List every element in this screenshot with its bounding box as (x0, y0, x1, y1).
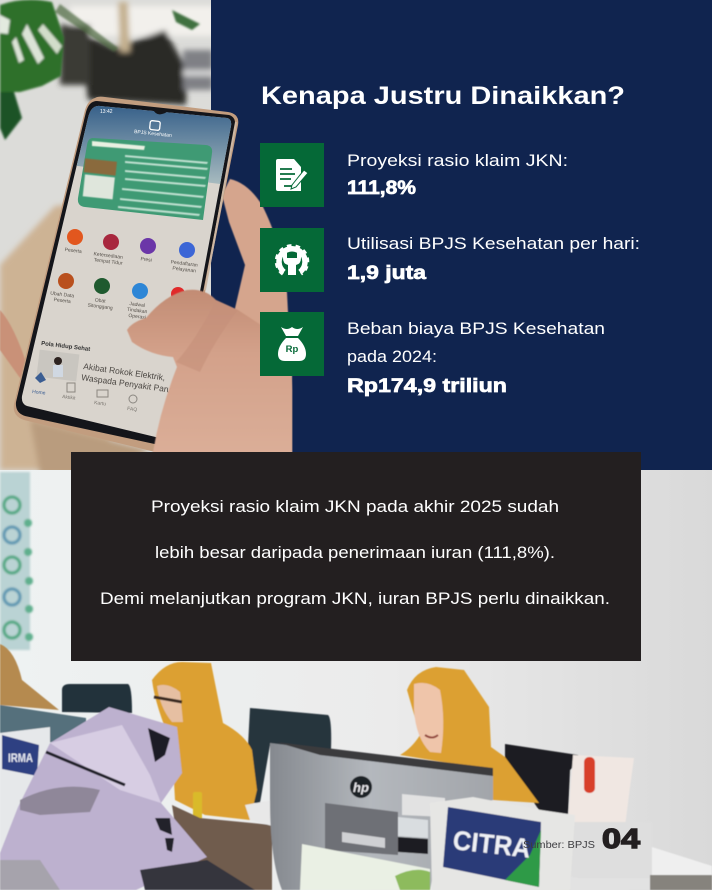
menu labels: Presi (140, 256, 152, 264)
value: Rp174,9 triliun (347, 375, 507, 397)
CITRA sign: CITRA (451, 825, 532, 864)
left monitor (0, 705, 86, 745)
decorative wall pattern (0, 472, 33, 650)
label second line: pada 2024: (347, 347, 437, 366)
wall (0, 470, 712, 890)
app banner (78, 138, 212, 220)
healthy living article: Waspada Penyakit Paru (81, 372, 172, 395)
plant leaves (0, 0, 200, 140)
page number: 04 (602, 823, 641, 854)
photo details (0, 644, 712, 890)
HP monitor: hp (353, 780, 369, 795)
photo: BPJS service counter (0, 470, 712, 890)
hand: thumb and palm (127, 290, 292, 470)
photo background: room (0, 0, 215, 475)
source credit: Sumber: BPJS (523, 839, 595, 851)
banner illustration (83, 141, 208, 216)
label: Beban biaya BPJS Kesehatan (347, 319, 605, 338)
purple patterned hijab (0, 707, 255, 890)
bottom nav: Home (32, 389, 46, 397)
CITRA sign (430, 797, 575, 890)
menu labels: Peserta (53, 297, 71, 305)
healthy living article: Akibat Rokok Elektrik, (83, 361, 166, 382)
HP monitor (270, 742, 493, 890)
callout panel (71, 452, 641, 661)
icon: document with pencil (260, 143, 324, 207)
background colleague (0, 644, 59, 710)
menu labels: Peserta (64, 247, 82, 255)
stat: claim ratio (260, 143, 568, 207)
callout line 2: lebih besar daripada penerimaan iuran (111,8%). (155, 543, 555, 562)
phone notch and edge (152, 108, 236, 290)
label: Proyeksi rasio klaim JKN: (347, 151, 568, 170)
bottom nav: FAQ (127, 406, 138, 413)
menu labels: Obat (94, 297, 106, 305)
photo: hand holding phone with BPJS app (0, 0, 292, 475)
brochure (300, 844, 430, 890)
bottom nav (32, 372, 138, 413)
bottom nav: Kartu (94, 400, 107, 407)
stat: annual cost (260, 312, 605, 397)
phone body (14, 97, 238, 453)
chairs (62, 684, 132, 713)
healthy living article: Pola Hidup Sehat (41, 341, 90, 353)
IRMA sign (0, 727, 50, 850)
app logo (150, 120, 160, 130)
stat: daily utilisation (260, 228, 640, 292)
menu labels: Tempat Tidur (93, 257, 123, 267)
left hand behind phone (0, 310, 25, 378)
label: Utilisasi BPJS Kesehatan per hari: (347, 234, 640, 253)
menu labels: Tindakan (127, 307, 148, 315)
healthy living article (36, 341, 172, 395)
menu labels: Operasi (128, 313, 146, 321)
menu icons (58, 229, 195, 301)
phone screen: BPJS Kesehatan (134, 129, 172, 139)
IRMA sign: IRMA (8, 751, 33, 765)
menu labels: Pendaftaran (170, 259, 198, 269)
hand behind phone: fingers (223, 178, 293, 452)
value: 111,8% (347, 177, 416, 199)
smiling woman (400, 667, 539, 803)
callout line 1: Proyeksi rasio klaim JKN pada akhir 2025 sudah (151, 497, 559, 516)
menu labels: Pelayanan (172, 266, 196, 274)
menu labels: Ubah Data (50, 291, 75, 299)
menu labels: Jadwal (129, 301, 145, 309)
phone screen (22, 106, 232, 438)
printer box (568, 755, 634, 827)
callout line 3: Demi melanjutkan program JKN, iuran BPJS perlu dinaikkan. (100, 589, 610, 608)
bottom nav: Aktikit (62, 394, 76, 402)
menu labels: Ketersediaan (93, 251, 123, 261)
icon: gear with wrench (260, 228, 324, 292)
navy background panel (211, 0, 712, 470)
menu labels: Sitonggang (87, 302, 113, 312)
phone screen: 13:42 (100, 109, 113, 115)
printer (570, 822, 652, 883)
desk (172, 805, 272, 890)
menu labels (50, 247, 198, 321)
value: 1,9 juta (347, 262, 426, 284)
woman in glasses (152, 662, 257, 826)
icon: money bag: Rp (286, 344, 299, 355)
icon: money bag (260, 312, 324, 376)
heading: Kenapa Justru Dinaikkan? (261, 82, 625, 110)
